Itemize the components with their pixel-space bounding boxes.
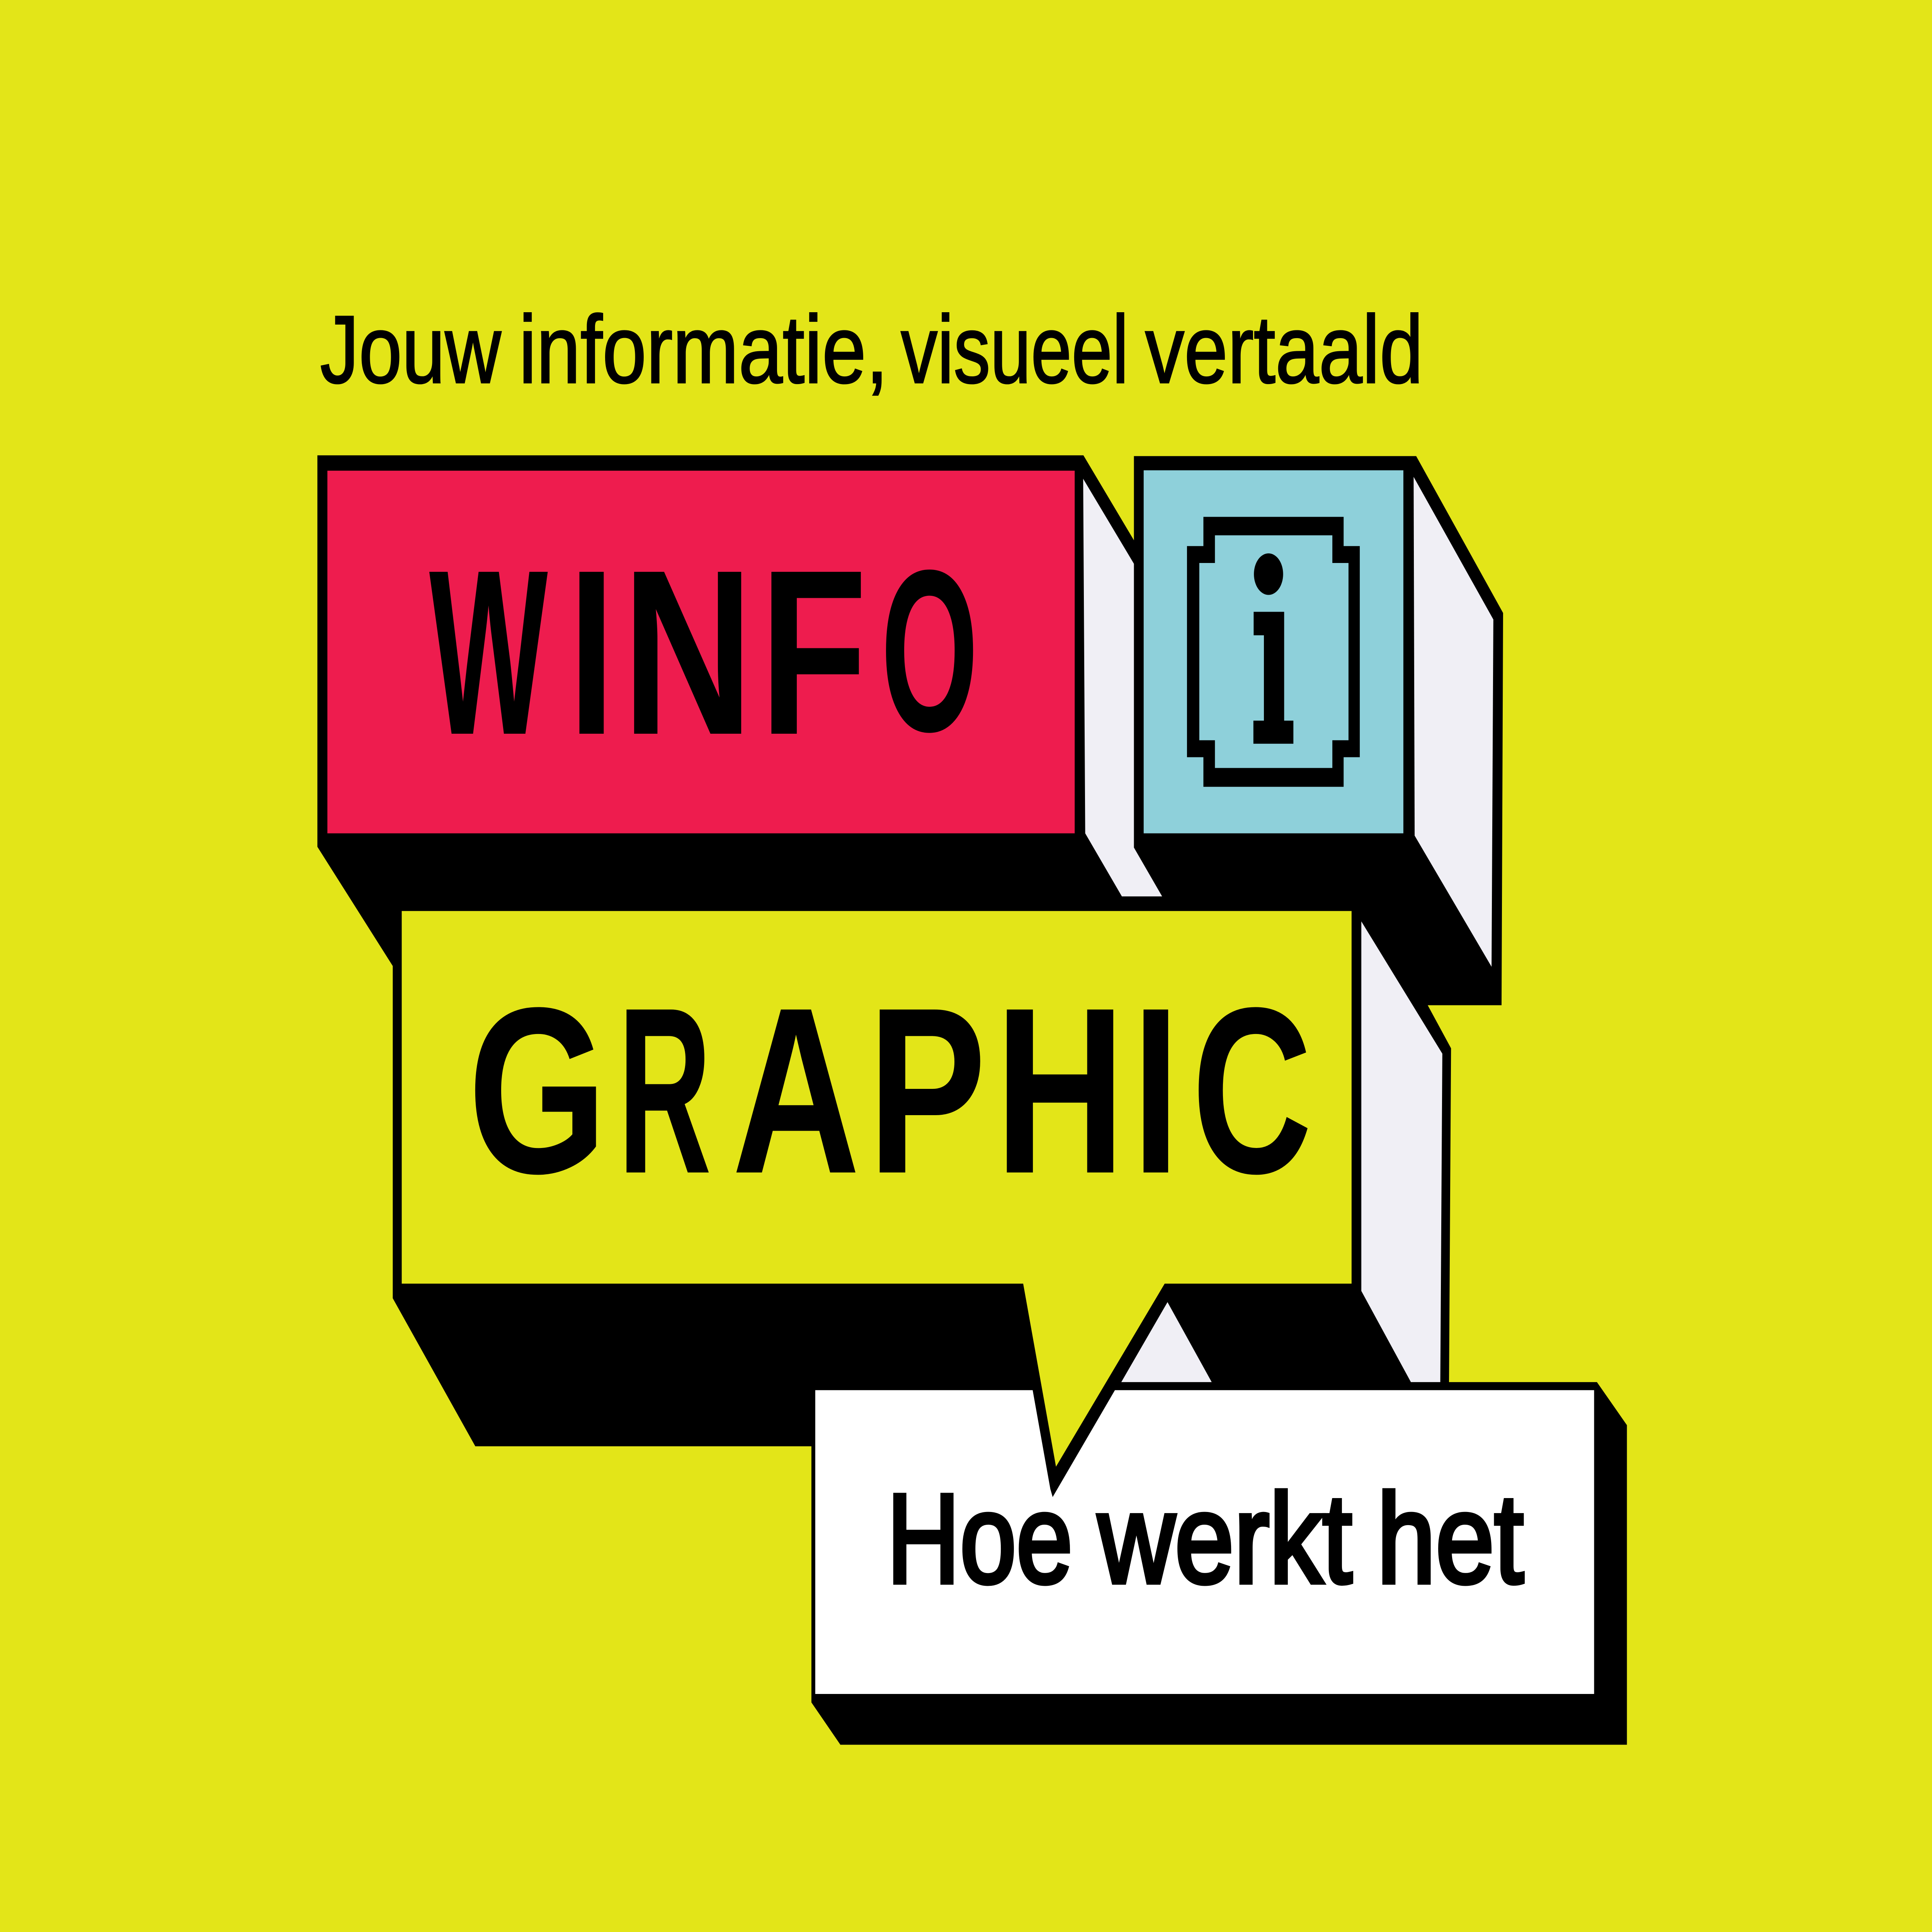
tagline: informatie,	[519, 296, 888, 403]
panel: info block	[1144, 470, 1493, 967]
callout label	[887, 1468, 1524, 1610]
icon: information badge	[1187, 517, 1360, 787]
callout label: Hoe	[887, 1468, 1073, 1610]
GRAPHIC wordmark: P	[868, 958, 986, 1223]
panel: GRAPHIC block	[402, 911, 1442, 1383]
WINFO wordmark: W	[429, 520, 549, 784]
GRAPHIC wordmark: G	[468, 958, 607, 1223]
logo: 3D block silhouette	[317, 455, 1503, 1446]
GRAPHIC wordmark	[468, 958, 1312, 1223]
side face of GRAPHIC block	[1361, 922, 1442, 1383]
panel: WINFO block	[327, 471, 1162, 896]
tagline: visueel	[901, 296, 1129, 403]
tagline: Jouw	[320, 296, 502, 403]
WINFO wordmark: F	[760, 520, 867, 784]
side face of info block	[1413, 477, 1493, 967]
GRAPHIC wordmark: R	[618, 958, 711, 1223]
side face of WINFO block	[1083, 479, 1162, 896]
GRAPHIC wordmark: I	[1132, 958, 1180, 1223]
speech bubble tail	[1014, 1284, 1166, 1497]
tagline	[320, 296, 1423, 403]
tagline: vertaald	[1145, 296, 1423, 403]
GRAPHIC wordmark: A	[732, 958, 860, 1223]
callout label: het	[1377, 1468, 1524, 1610]
callout label: werkt	[1096, 1468, 1352, 1610]
side face sliver behind speech tail	[1121, 1302, 1212, 1383]
WINFO wordmark: N	[622, 520, 753, 784]
GRAPHIC wordmark: H	[995, 958, 1126, 1223]
WINFO wordmark	[429, 520, 978, 784]
callout: Hoe werkt het speech box	[811, 1284, 1627, 1745]
WINFO wordmark: I	[568, 520, 615, 784]
GRAPHIC wordmark: C	[1192, 958, 1312, 1223]
WINFO wordmark: O	[881, 522, 978, 780]
